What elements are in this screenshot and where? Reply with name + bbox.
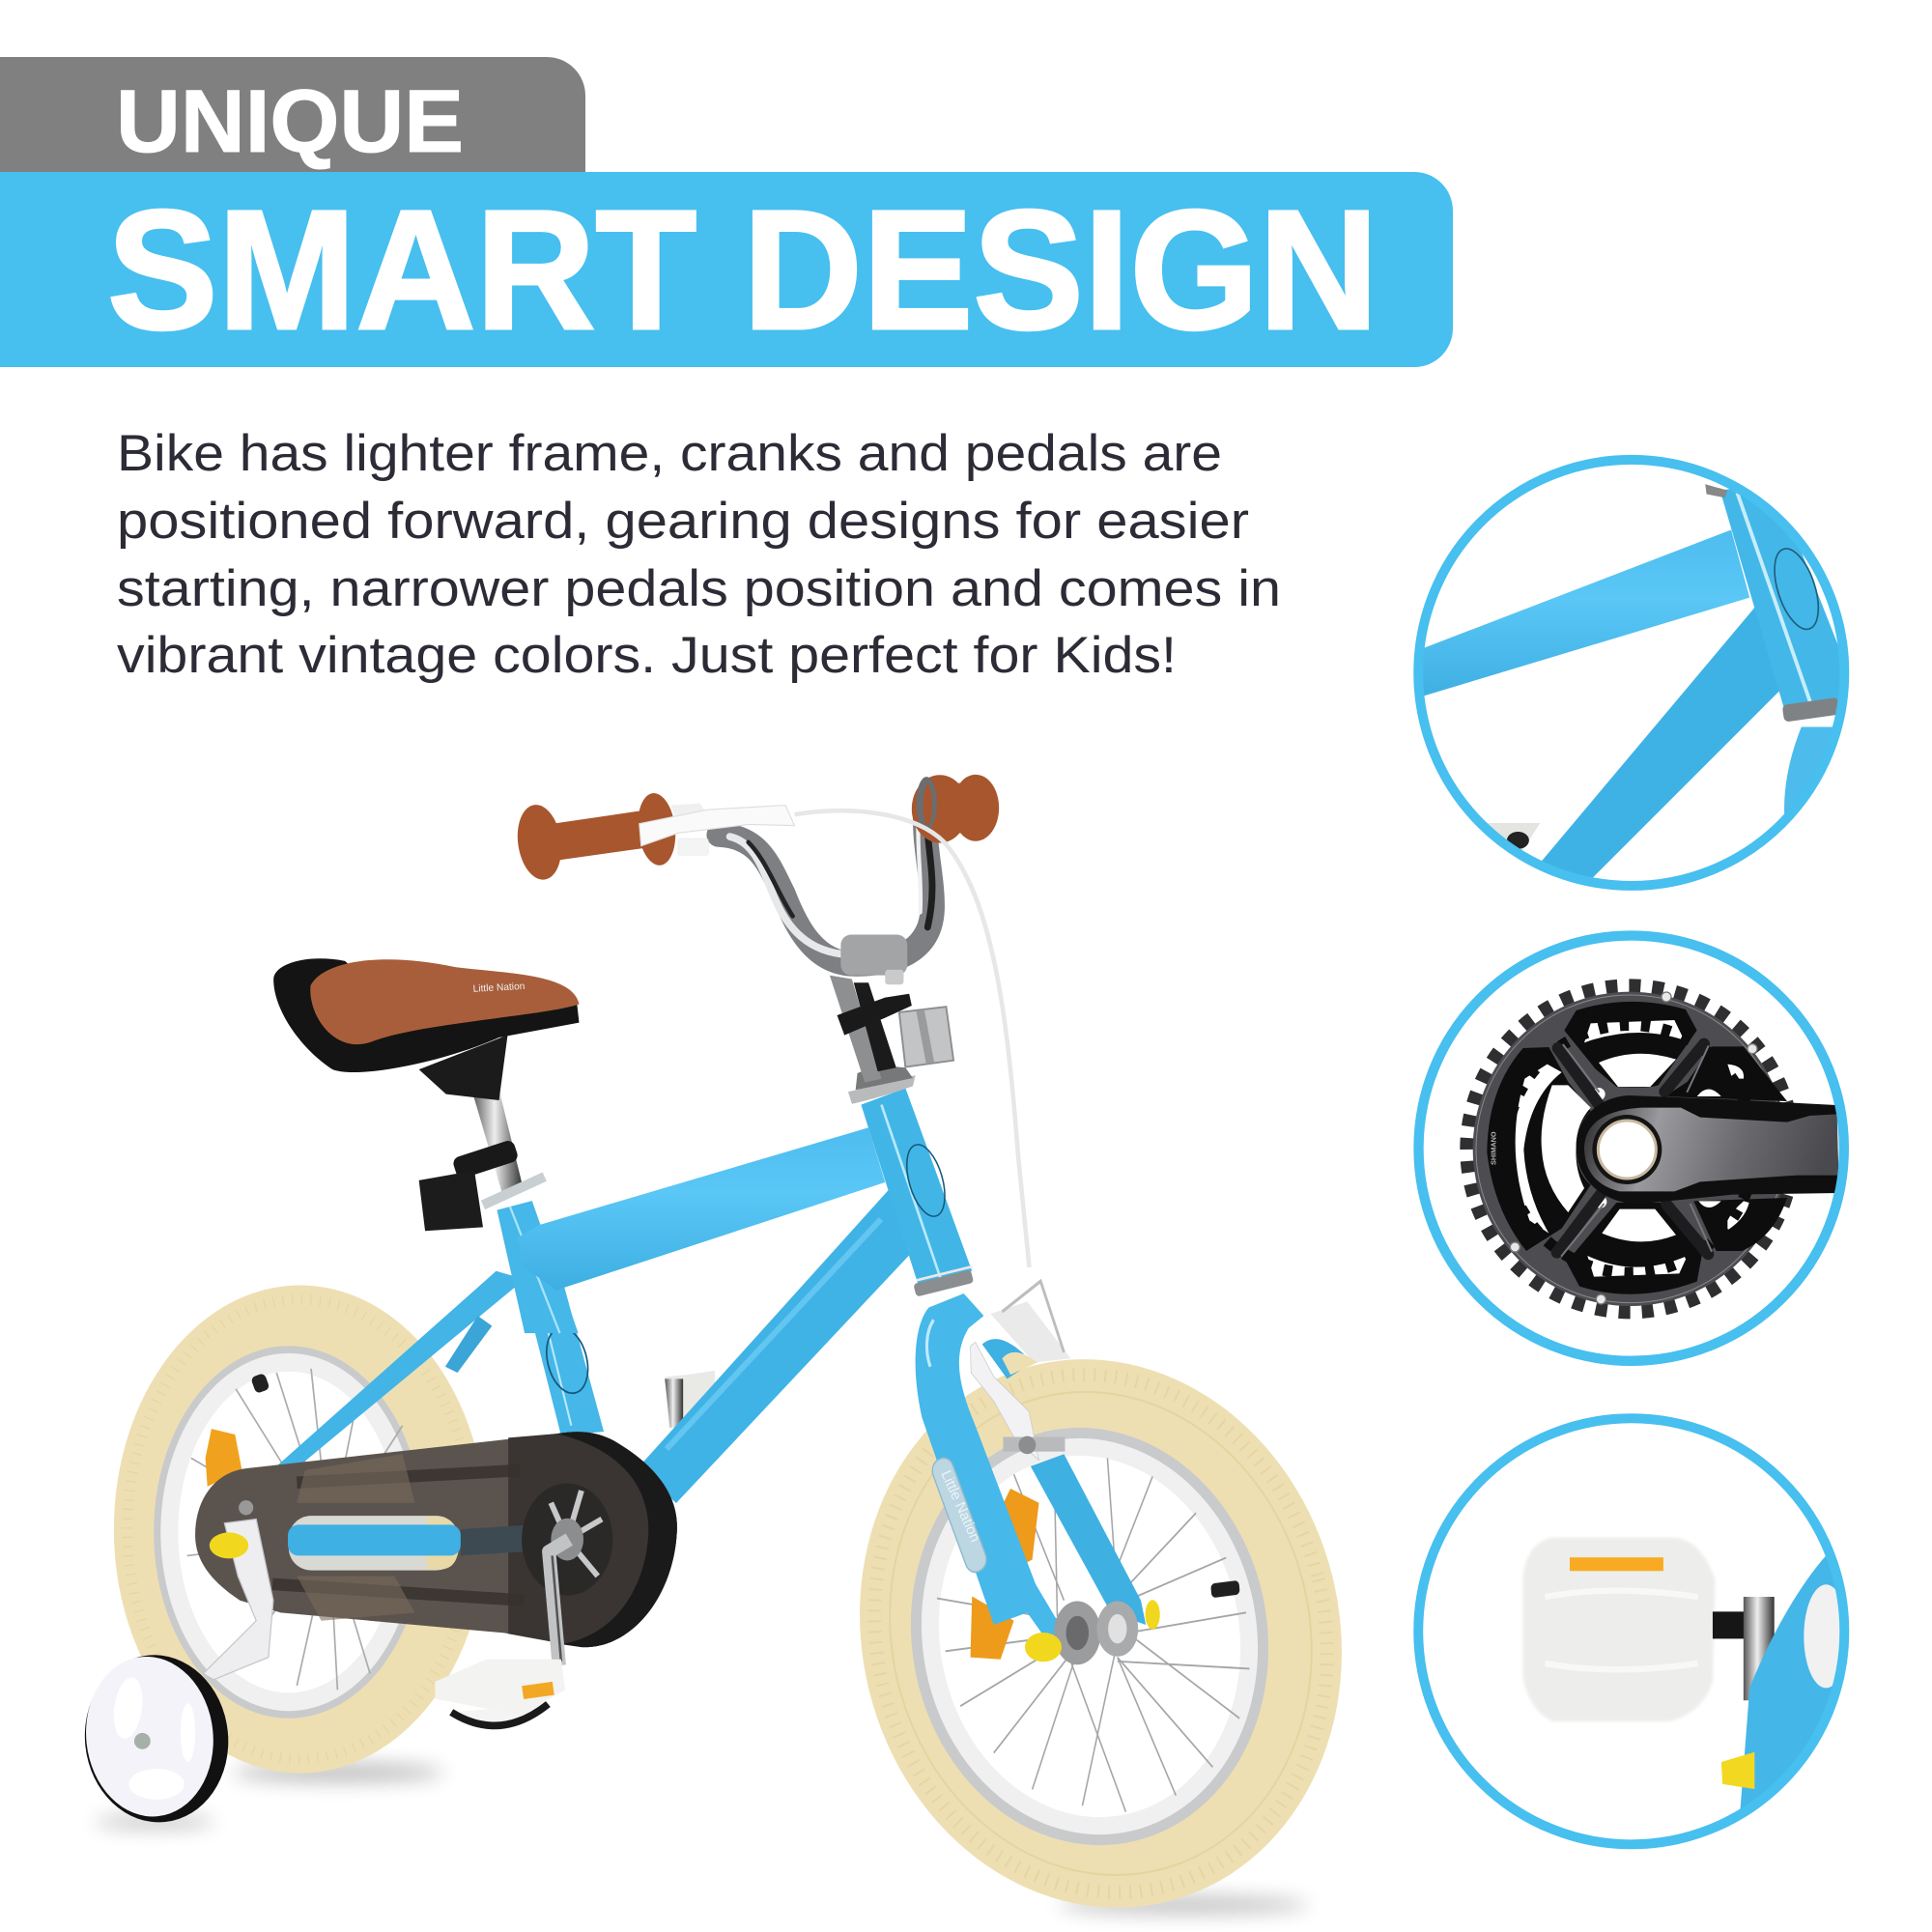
far training wheel	[451, 1704, 548, 1725]
bearing	[1592, 1115, 1662, 1184]
seat and seatpost	[273, 958, 579, 1231]
heading tab: UNIQUE	[0, 57, 585, 173]
spider arms	[1557, 1044, 1712, 1256]
description text: starting, narrower pedals position and comes in	[117, 560, 1281, 617]
window openings	[1516, 1020, 1749, 1277]
chainring body	[1473, 992, 1787, 1306]
heading banner: SMART DESIGN: SMART DESIGN	[107, 176, 1378, 365]
crank arm	[1577, 1095, 1839, 1205]
grips	[513, 775, 999, 883]
seat and seatpost: Little Nation	[472, 981, 526, 995]
bicycle illustration	[76, 775, 1399, 1932]
hub	[1054, 1602, 1101, 1664]
front wheel spokes, fork and hub	[916, 1281, 1249, 1812]
training wheel assembly	[76, 1500, 273, 1830]
reflectors	[996, 1489, 1038, 1572]
spider windows	[1487, 1002, 1787, 1294]
fork label: Little Nation	[937, 1468, 983, 1545]
stem and head reflector	[830, 976, 953, 1083]
pedal	[1523, 1538, 1715, 1721]
bolts	[1510, 992, 1757, 1304]
description text: Bike has lighter frame, cranks and pedals are	[117, 425, 1222, 482]
frame tubes	[1410, 529, 1749, 699]
upper frame tubes	[497, 1066, 974, 1333]
detail circle: frame	[1410, 460, 1861, 899]
right fork leg	[982, 1339, 1033, 1378]
chainring teeth	[1467, 986, 1793, 1312]
description text: positioned forward, gearing designs for easier	[117, 493, 1249, 550]
brake arm	[971, 1342, 1038, 1461]
chain guard	[195, 1432, 677, 1647]
ground shadows	[95, 1764, 1309, 1913]
seat stays and rear tubes	[276, 1271, 715, 1466]
front wheel	[803, 1308, 1399, 1932]
rear reflector	[206, 1429, 242, 1487]
detail circle: pedal	[1418, 1418, 1848, 1848]
brake arch	[990, 1301, 1070, 1362]
down tube	[638, 1183, 918, 1503]
description text: vibrant vintage colors. Just perfect for Kids!	[117, 627, 1177, 684]
crank and pedal	[435, 1540, 569, 1715]
brand text: SHIMANO	[1490, 1131, 1498, 1165]
rear spokes	[187, 1369, 411, 1690]
detail circle: crankset	[1418, 935, 1844, 1361]
rear wheel	[114, 1286, 486, 1774]
description text	[117, 425, 1281, 684]
brake lever and cable	[639, 804, 1030, 1267]
left fork leg	[916, 1293, 1074, 1651]
inner ring teeth	[1506, 1025, 1754, 1273]
handlebar	[719, 802, 932, 984]
heading tab: UNIQUE: UNIQUE	[116, 72, 464, 171]
frame	[276, 1066, 974, 1503]
far pedal bracket	[665, 1371, 715, 1428]
